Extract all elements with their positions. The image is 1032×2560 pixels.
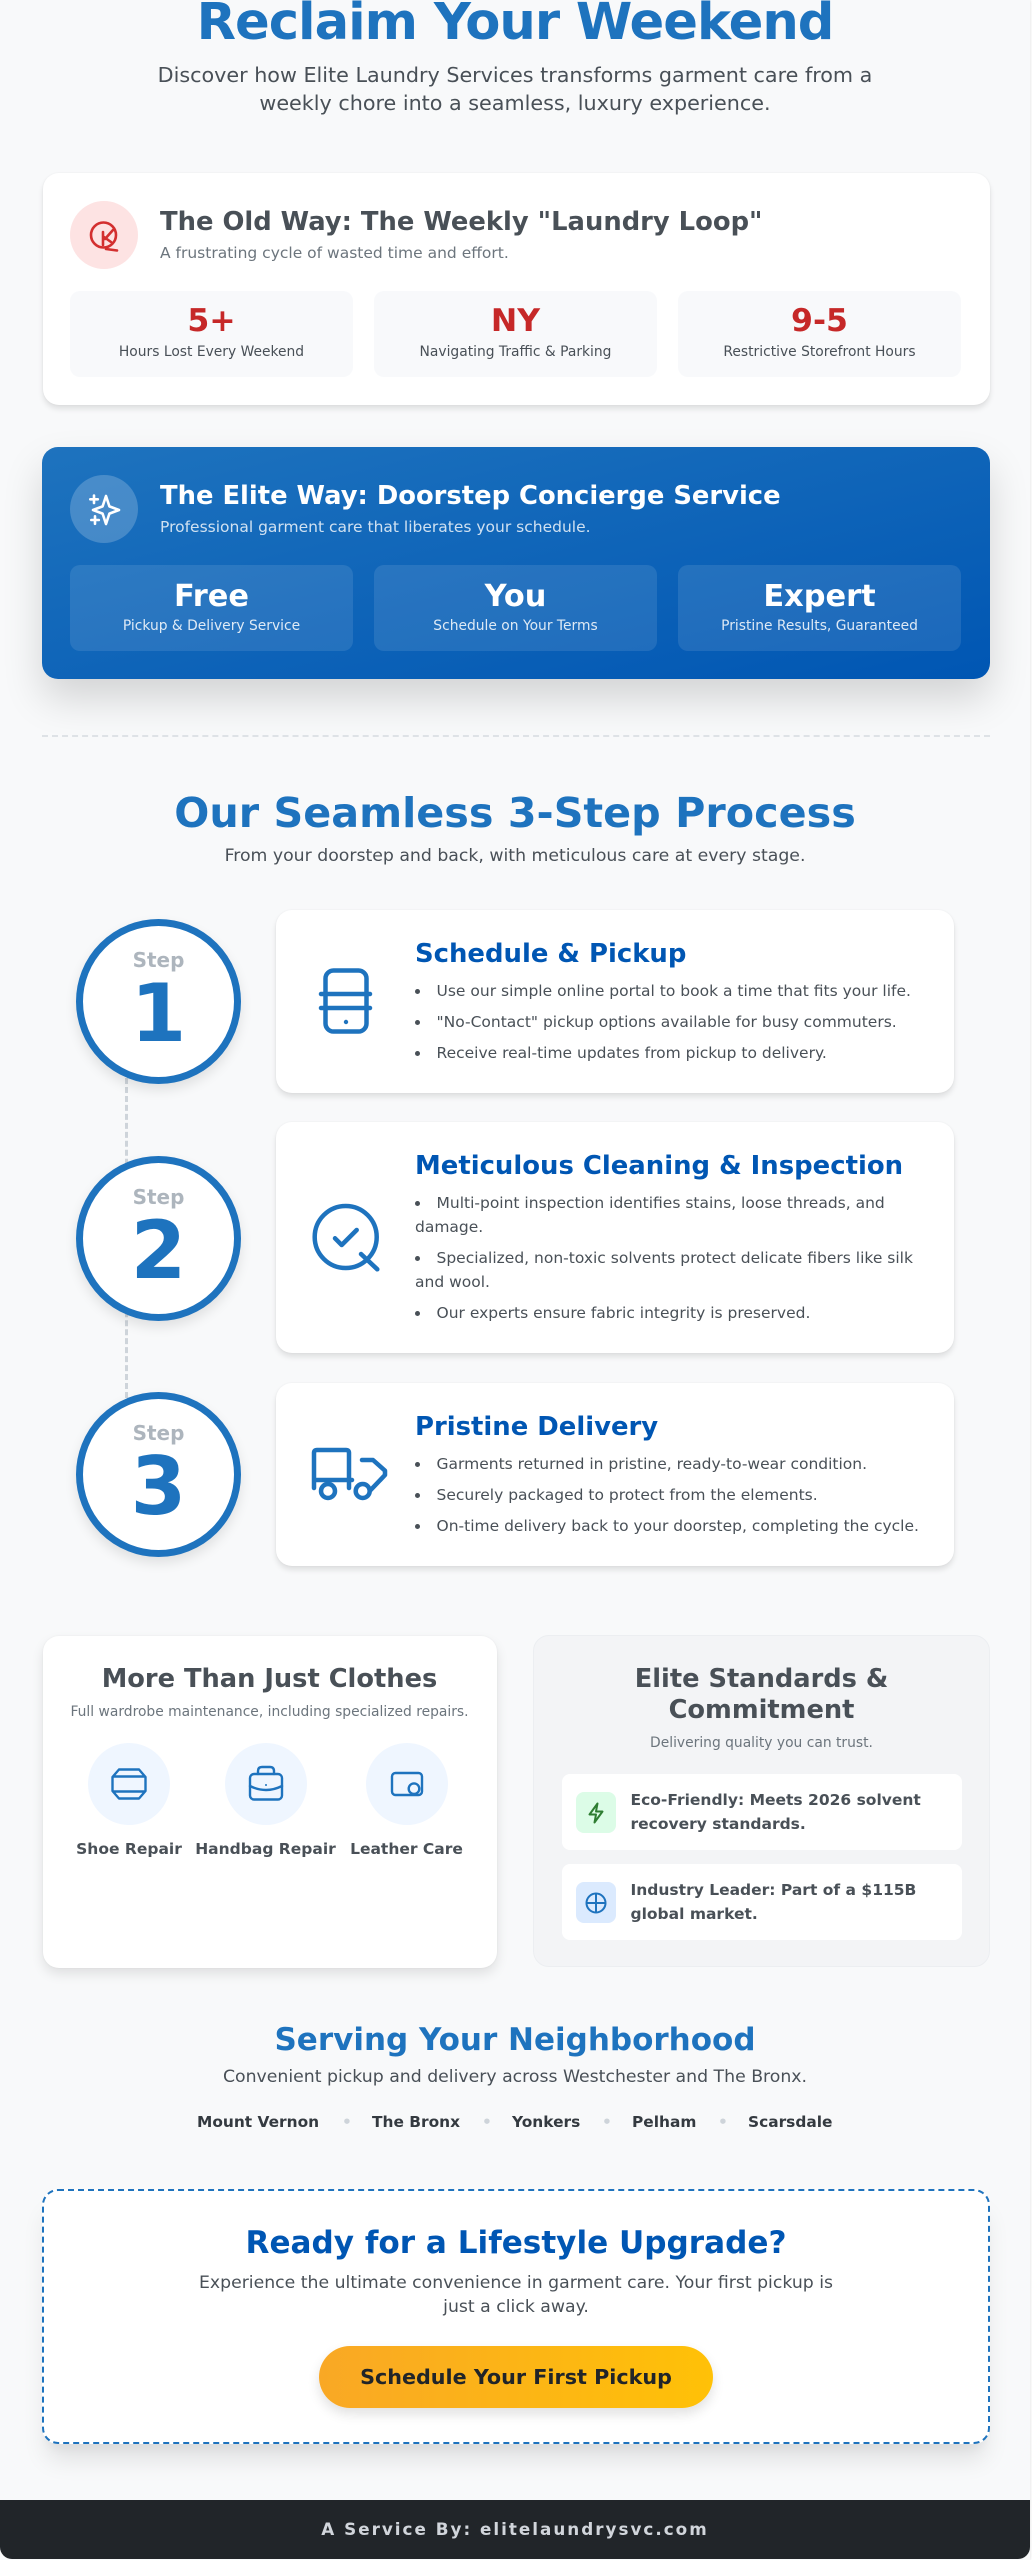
step 1 bullets: "No-Contact" pickup options available for busy commuters. [436, 1013, 897, 1031]
location list [197, 2113, 832, 2131]
stat: hours lost: 5+ [187, 303, 236, 339]
location list: Yonkers [512, 2113, 580, 2131]
step 3 bullets [415, 1455, 919, 1535]
stat: hours lost [70, 291, 353, 377]
stat: expert: Expert [763, 579, 876, 614]
icon: wallet [366, 1743, 448, 1825]
section subtitle: neighborhood: Convenient pickup and delivery across Westchester and The Bronx. [223, 2067, 807, 2087]
stat: traffic: Navigating Traffic & Parking [420, 344, 611, 360]
footer: A Service By: elitelaundrysvc.com [321, 2519, 709, 2539]
panel description: Full wardrobe maintenance, including specialized repairs. [70, 1704, 469, 1720]
section heading: process: Our Seamless 3-Step Process [174, 789, 856, 837]
icon: globe [576, 1882, 616, 1923]
panel heading: Commitment [669, 1695, 854, 1725]
step 2 badge [76, 1156, 241, 1321]
stat: traffic: NY [491, 303, 540, 339]
icon: handbag [224, 1743, 306, 1825]
icon: sparkles [70, 475, 138, 543]
location list: • [342, 2113, 352, 2131]
stat: free [70, 565, 353, 651]
stat: expert: Pristine Results, Guaranteed [721, 618, 918, 634]
service: leather care [350, 1743, 463, 1858]
subtitle [158, 63, 872, 115]
location list: The Bronx [372, 2113, 460, 2131]
location list: Pelham [632, 2113, 696, 2131]
stat: hours: 9-5 [791, 303, 848, 339]
step 3 title: Pristine Delivery [415, 1412, 658, 1442]
stat: expert [678, 565, 961, 651]
stat: free: Free [174, 579, 249, 614]
location list: Scarsdale [748, 2113, 832, 2131]
step 3 [74, 1391, 956, 1571]
step 3 badge: 3 [131, 1440, 186, 1533]
step 2 card [276, 1122, 954, 1353]
step 3 bullets: Garments returned in pristine, ready-to-wear condition. [436, 1455, 867, 1473]
call to action text [199, 2273, 833, 2317]
step 3 card [276, 1383, 954, 1566]
icon: inspection magnifier [312, 1204, 380, 1272]
step 1 badge: 1 [131, 967, 186, 1060]
step 2 bullets: Specialized, non-toxic solvents protect delicate fibers like silk and wool. [415, 1249, 913, 1291]
step 3 bullets: Securely packaged to protect from the elements. [436, 1486, 818, 1504]
item: eco friendly [562, 1774, 962, 1850]
step 1 title: Schedule & Pickup [415, 939, 686, 969]
stat: free: Pickup & Delivery Service [123, 618, 300, 634]
panel heading: Elite Standards & [635, 1664, 888, 1694]
item: industry leader [562, 1864, 962, 1940]
item text: Industry Leader: Part of a $115B global market. [630, 1881, 916, 1923]
panel: elite standards [533, 1635, 990, 1967]
panel heading [635, 1664, 888, 1725]
step 1 bullets [415, 982, 911, 1062]
item text: Eco-Friendly: Meets 2026 solvent recovery standards. [630, 1791, 921, 1833]
step 1 card [276, 910, 954, 1093]
step 2 title: Meticulous Cleaning & Inspection [415, 1151, 903, 1181]
stat: traffic [374, 291, 657, 377]
service: handbag repair [195, 1743, 336, 1858]
icon: frustrating clock loop [70, 201, 138, 269]
label: Handbag Repair [195, 1840, 336, 1858]
step 2 badge: Step [133, 1185, 184, 1209]
panel: the elite way [42, 447, 990, 679]
description: A frustrating cycle of wasted time and effort. [160, 244, 509, 262]
call to action text: Experience the ultimate convenience in garment care. Your first pickup is [199, 2273, 833, 2293]
call to action button [319, 2346, 713, 2408]
panel heading: More Than Just Clothes [102, 1664, 437, 1694]
location list: • [482, 2113, 492, 2131]
heading: The Elite Way: Doorstep Concierge Service [160, 481, 781, 511]
icon: delivery truck [312, 1448, 388, 1500]
step 1 [74, 918, 956, 1098]
section heading: neighborhood: Serving Your Neighborhood [274, 2022, 756, 2058]
step 1 badge [76, 919, 241, 1084]
step 3 bullets: On-time delivery back to your doorstep, completing the cycle. [436, 1517, 919, 1535]
call to action text: just a click away. [443, 2297, 589, 2317]
location list: Mount Vernon [197, 2113, 319, 2131]
stat: hours: Restrictive Storefront Hours [723, 344, 916, 360]
connector line between steps [125, 1078, 128, 1398]
step 1 bullets: Use our simple online portal to book a time that fits your life. [436, 982, 911, 1000]
step 3 badge [76, 1392, 241, 1557]
step 1 badge: Step [133, 948, 184, 972]
step 2 bullets: Our experts ensure fabric integrity is preserved. [436, 1304, 810, 1322]
stat: you: Schedule on Your Terms [433, 618, 598, 634]
location list: • [718, 2113, 728, 2131]
subtitle: weekly chore into a seamless, luxury experience. [259, 91, 771, 115]
footer [0, 2500, 1030, 2559]
step 2 [74, 1130, 956, 1358]
heading: The Old Way: The Weekly "Laundry Loop" [160, 207, 762, 237]
location list: • [602, 2113, 612, 2131]
stat: hours [678, 291, 961, 377]
icon: smartphone [318, 968, 372, 1034]
step 2 badge: 2 [131, 1204, 186, 1297]
panel: the old way [42, 173, 990, 405]
section subtitle: process: From your doorstep and back, with meticulous care at every stage. [225, 846, 805, 866]
stat: you: You [485, 579, 546, 614]
icon: shoe [88, 1743, 170, 1825]
label: Leather Care [350, 1840, 463, 1858]
stat: hours lost: Hours Lost Every Weekend [119, 344, 304, 360]
panel description: Delivering quality you can trust. [650, 1735, 873, 1751]
step 2 bullets [415, 1194, 913, 1322]
call to action heading: Ready for a Lifestyle Upgrade? [246, 2225, 786, 2261]
label: Shoe Repair [76, 1840, 182, 1858]
call to action panel [42, 2189, 990, 2444]
subtitle: Discover how Elite Laundry Services transforms garment care from a [158, 63, 872, 87]
call to action button: Schedule Your First Pickup [360, 2365, 672, 2389]
description: Professional garment care that liberates your schedule. [160, 518, 591, 536]
step 1 bullets: Receive real-time updates from pickup to delivery. [436, 1044, 827, 1062]
icon: bolt [576, 1792, 616, 1833]
stat: you [374, 565, 657, 651]
step 2 bullets: Multi-point inspection identifies stains, loose threads, and damage. [415, 1194, 885, 1236]
step 3 badge: Step [133, 1421, 184, 1445]
panel: more than just clothes [42, 1636, 497, 1968]
service: shoe repair [76, 1743, 182, 1858]
